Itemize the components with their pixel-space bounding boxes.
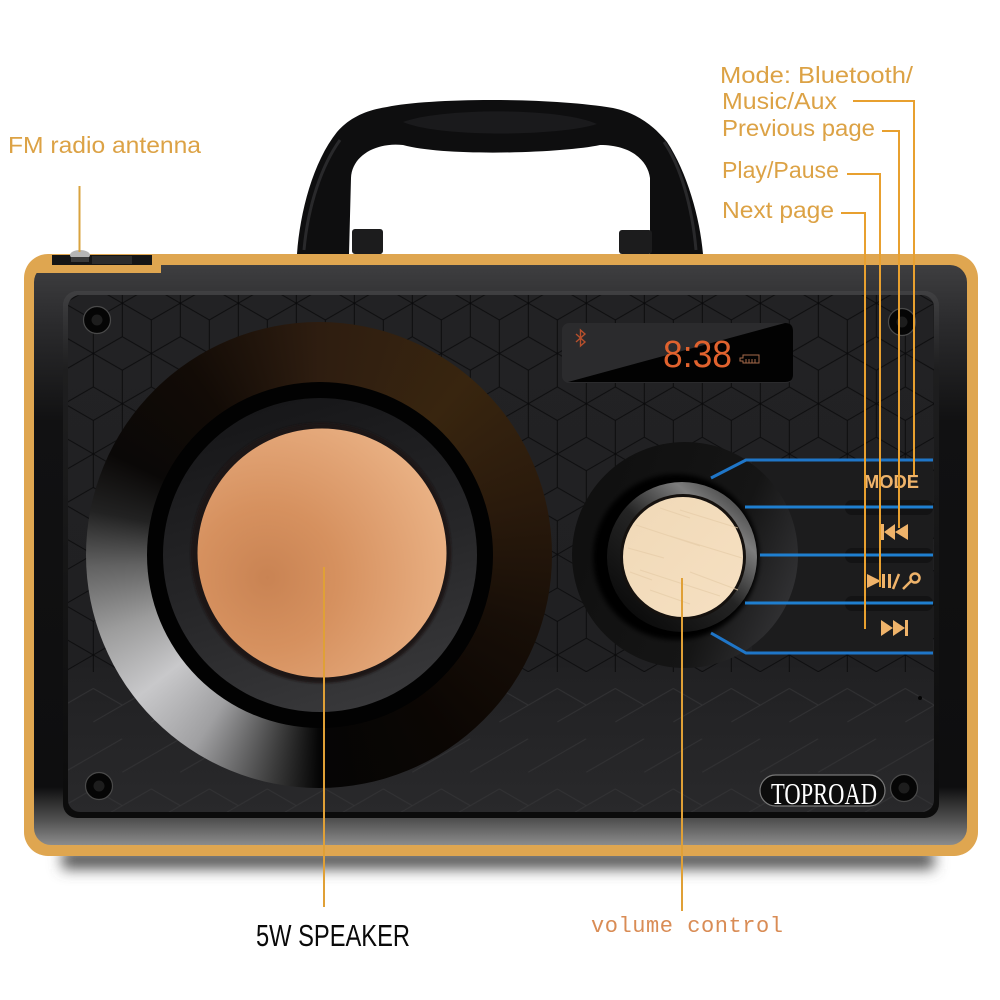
- pointer: play pause: [847, 174, 880, 587]
- pointer: volume: [681, 578, 683, 911]
- speaker cone: [86, 322, 552, 788]
- copper dome: [198, 428, 446, 678]
- label: mode: Mode: Bluetooth/: [720, 62, 913, 88]
- pointer: antenna: [78, 186, 80, 252]
- antenna slot: [34, 250, 161, 273]
- label: volume control: volume control: [591, 914, 783, 939]
- volume knob: [572, 442, 798, 668]
- wood cap: [623, 497, 743, 617]
- brand badge: TOPROAD: [771, 776, 877, 811]
- previous icon: [881, 524, 908, 540]
- screw bottom left: [86, 772, 112, 800]
- next icon: [881, 620, 908, 636]
- label: next page: Next page: [722, 197, 834, 223]
- battery icon: [740, 355, 759, 363]
- speaker case: [24, 254, 978, 856]
- label: FM radio antenna: FM radio antenna: [8, 132, 202, 158]
- mode button label: MODE: [864, 471, 919, 492]
- display: [562, 323, 793, 383]
- pointer: previous: [882, 131, 899, 528]
- pointer: speaker: [323, 567, 325, 907]
- bluetooth icon: [576, 330, 585, 346]
- label: 5W speaker: 5W SPEAKER: [256, 918, 410, 953]
- screw top right: [888, 308, 916, 336]
- label: previous page: Previous page: [722, 115, 875, 141]
- play pause icon: [867, 574, 920, 589]
- carrying handle: [297, 100, 703, 254]
- front panel: [63, 291, 939, 818]
- ground shadow: [62, 850, 934, 869]
- button strip: [752, 460, 933, 654]
- clock digits: 8:38: [663, 334, 732, 376]
- screw top left: [84, 306, 110, 334]
- pointer: next: [841, 213, 865, 629]
- label: mode: Music/Aux: [722, 88, 837, 114]
- pointer: mode: [853, 101, 914, 475]
- screw bottom right: [890, 774, 918, 802]
- label: play pause: Play/Pause: [722, 157, 839, 183]
- mic hole: [918, 696, 922, 700]
- speaker driver: [147, 382, 493, 728]
- blue light lines: [711, 460, 933, 653]
